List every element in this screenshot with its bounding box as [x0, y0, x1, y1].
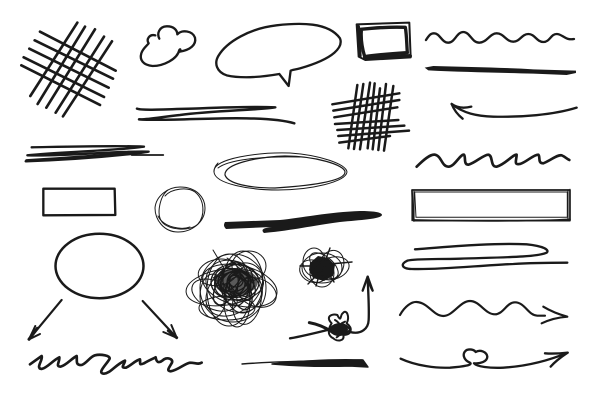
large black scribble — [184, 249, 281, 327]
sketched circle — [155, 187, 205, 232]
outlined rectangle — [43, 189, 115, 215]
crosshatch grid, centre — [332, 83, 409, 151]
arrow pointing down-left — [29, 300, 62, 339]
overlapping scratch lines — [26, 146, 163, 161]
sketched double rectangle — [412, 189, 570, 221]
hand-drawn thick square — [357, 23, 411, 60]
small black scribble — [296, 247, 352, 287]
arrow pointing down-right — [143, 301, 177, 338]
knotted arrow pointing up — [290, 277, 373, 341]
thick brush stroke, top right — [425, 66, 576, 75]
curved arrow pointing left — [452, 104, 577, 119]
jagged squiggle, bottom left — [30, 355, 202, 374]
wavy arrow pointing right — [400, 301, 567, 323]
irregular wavy line — [417, 155, 569, 167]
icon: cloud — [141, 26, 195, 66]
merged underline strokes, bottom centre — [242, 360, 368, 367]
wavy line, top right — [426, 32, 574, 43]
looping underline stroke — [403, 244, 567, 269]
large oval — [56, 234, 144, 298]
heart-loop arrow pointing right — [401, 349, 568, 368]
speech bubble — [216, 24, 341, 86]
thick brush stroke, centre — [224, 211, 382, 233]
crosshatch grid, top left — [21, 23, 116, 116]
double underline stroke — [137, 107, 294, 123]
sketched double oval — [214, 153, 347, 190]
